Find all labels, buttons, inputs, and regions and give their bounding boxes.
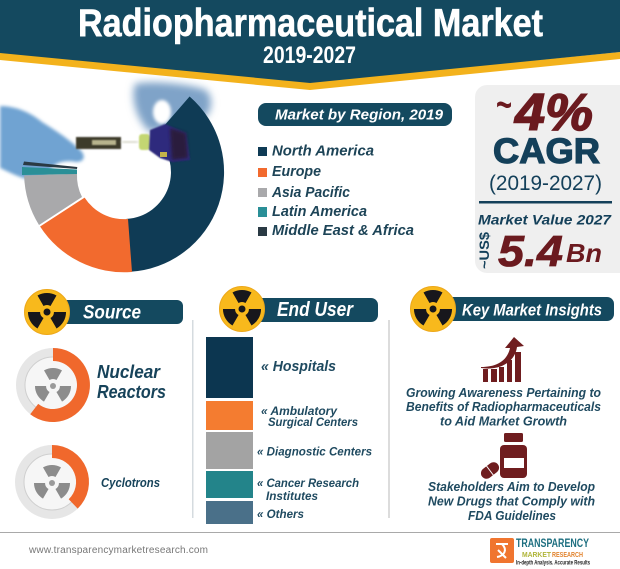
market value figure: Bn xyxy=(566,238,602,268)
panel: CAGR and market value xyxy=(475,83,620,276)
gauge: nuclear reactors xyxy=(16,348,90,422)
legend xyxy=(258,142,414,239)
label: cyclotrons: Cyclotrons xyxy=(101,476,160,490)
heading: source: Source xyxy=(83,302,141,324)
legend: North America xyxy=(272,142,374,160)
end user labels: « Hospitals xyxy=(261,358,336,375)
CAGR period: (2019-2027) xyxy=(489,172,602,195)
insight text: stakeholders: New Drugs that Comply with xyxy=(428,494,595,508)
label: nuclear reactors: Reactors xyxy=(97,382,166,402)
currency label: ~US$ xyxy=(476,232,492,269)
insight text: stakeholders: FDA Guidelines xyxy=(468,509,556,523)
logo: transparency market research: RESEARCH xyxy=(552,550,583,559)
logo: transparency market research: In-depth Analysis. Accurate Results xyxy=(516,560,590,566)
legend: Europe xyxy=(272,163,321,180)
icon: radiation xyxy=(24,290,70,334)
insight text: stakeholders: Stakeholders Aim to Develop xyxy=(428,480,595,494)
legend: Middle East & Africa xyxy=(272,222,414,239)
heading: key market insights xyxy=(410,286,614,332)
footer website: www.transparencymarketresearch.com xyxy=(28,545,208,556)
legend: Asia Pacific xyxy=(271,184,351,201)
logo: transparency market research: TRANSPARENCY xyxy=(516,536,589,550)
CAGR percentage: ~ xyxy=(496,83,512,127)
subtitle years: 2019-2027 xyxy=(263,42,356,69)
insight text: growing awareness: Growing Awareness Pertaining to xyxy=(406,386,601,400)
market value figure: 5.4 xyxy=(498,227,563,276)
header banner xyxy=(0,0,620,90)
icon: medicine bottle and pill xyxy=(479,433,527,481)
market value figure xyxy=(498,227,602,276)
CAGR percentage: 4% xyxy=(514,84,593,142)
photo: gloved hands behind the donut xyxy=(0,82,211,181)
insight text: stakeholders xyxy=(428,480,595,523)
insight text: growing awareness xyxy=(406,386,601,428)
legend: Latin America xyxy=(272,203,367,220)
end user labels: « Cancer Research xyxy=(257,476,359,490)
photo: syringe and vial xyxy=(76,124,190,162)
insight text: growing awareness: Benefits of Radiopharmaceuticals xyxy=(406,400,601,414)
title: Radiopharmaceutical Market xyxy=(78,2,543,45)
heading: end user: End User xyxy=(277,299,354,321)
donut chart: market by region xyxy=(22,96,224,272)
end user labels: Institutes xyxy=(266,489,318,503)
logo: transparency market research xyxy=(490,536,590,566)
logo: transparency market research: MARKET xyxy=(522,550,551,559)
market value label: Market Value 2027 xyxy=(478,212,612,228)
end user labels: « Others xyxy=(257,507,304,521)
gauge: cyclotrons xyxy=(15,445,89,519)
icon: growth chart with arrow xyxy=(481,337,524,382)
end user labels: « Ambulatory xyxy=(261,404,338,418)
insight text: growing awareness: to Aid Market Growth xyxy=(440,414,567,428)
pill heading: market by region: Market by Region, 2019 xyxy=(275,106,444,124)
label: nuclear reactors xyxy=(97,362,166,402)
pill heading: market by region xyxy=(258,103,452,126)
heading: key market insights: Key Market Insights xyxy=(462,300,602,320)
end user labels: Surgical Centers xyxy=(268,415,358,429)
logo mark xyxy=(490,538,514,563)
label: nuclear reactors: Nuclear xyxy=(97,362,161,382)
heading: source xyxy=(24,290,183,334)
icon: radiation xyxy=(410,286,456,332)
end user labels xyxy=(257,358,372,521)
heading: end user xyxy=(220,286,378,332)
stacked bar: end user xyxy=(206,337,253,524)
end user labels: « Diagnostic Centers xyxy=(257,444,372,458)
CAGR label: CAGR xyxy=(493,132,600,171)
icon: radiation xyxy=(220,286,264,332)
